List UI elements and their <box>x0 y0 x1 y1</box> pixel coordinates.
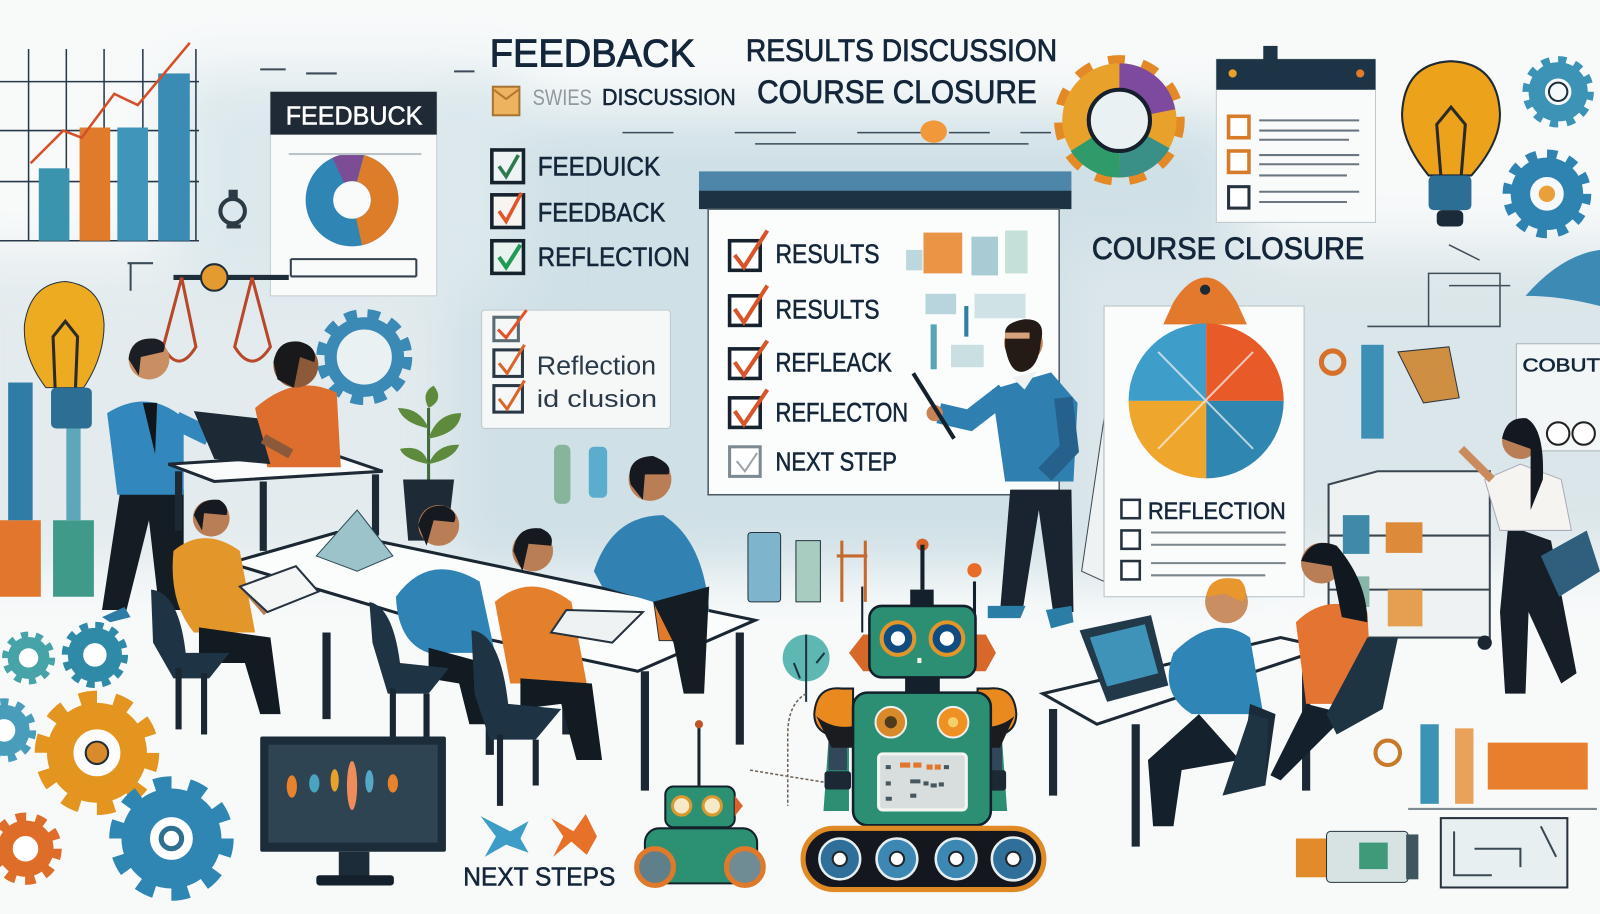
whiteboard <box>699 171 1071 495</box>
gear orange <box>0 817 57 880</box>
student blue sweater <box>1169 628 1263 714</box>
icon: instruments <box>1321 345 1459 439</box>
tracks <box>803 828 1044 890</box>
whiteboard checklist: REFLECTON <box>776 397 908 427</box>
label: next steps: NEXT STEPS <box>463 863 615 891</box>
bar chart top left <box>0 43 199 241</box>
person: woman with bag <box>1461 418 1600 694</box>
icon: battery canister <box>1296 831 1418 882</box>
decorative dash row <box>622 133 1051 144</box>
icon: orange clip <box>1163 277 1247 324</box>
plant <box>398 386 461 541</box>
head <box>869 606 976 677</box>
icon: light bulb top right <box>1402 61 1500 226</box>
checklist: feedback items: FEEDUICK <box>538 151 660 181</box>
panel: pie chart clipboard <box>1082 277 1304 597</box>
person: seated man in orange with laptop <box>194 341 341 467</box>
icon: schematic card <box>1441 818 1567 887</box>
donut chart <box>309 157 395 243</box>
small sketch right of clipboard <box>1367 245 1510 326</box>
laptop <box>1080 615 1168 702</box>
heading: course closure: COURSE CLOSURE <box>1092 230 1364 266</box>
robot screen <box>879 754 966 810</box>
icon: striped leaf <box>1526 250 1600 306</box>
whiteboard checklist: RESULTS <box>776 239 880 269</box>
panel: reflection card: Reflection <box>537 352 656 380</box>
person: teacher <box>913 319 1078 628</box>
gear amber <box>42 698 152 808</box>
panel heading: FEEDBUCK <box>286 102 422 130</box>
icon: teal globe with dashed wire <box>750 634 832 806</box>
whiteboard checklist <box>730 231 908 476</box>
card: course <box>1516 344 1600 451</box>
bottom left gears <box>0 625 227 894</box>
title: course closure: COURSE CLOSURE <box>757 73 1037 110</box>
icon: orange envelope <box>493 87 519 115</box>
panel: feedback dashboard <box>270 92 437 296</box>
gear teal <box>5 634 52 681</box>
subtitle: discussion: DISCUSSION <box>602 84 736 110</box>
big robot <box>803 539 1044 890</box>
small vials <box>554 445 867 602</box>
icon: small figure ornament <box>220 190 245 226</box>
monitor <box>260 737 446 885</box>
icon: orange marker <box>920 120 947 143</box>
subtitle: discussion: SWIES <box>533 85 592 110</box>
pie chart <box>1129 323 1284 478</box>
arms <box>814 688 1016 811</box>
mini bar chart bottom right <box>1376 724 1597 809</box>
decorative marks top <box>128 69 474 291</box>
whiteboard mini charts <box>906 231 1028 369</box>
icon: orange cup <box>653 597 682 641</box>
icon: small robot <box>637 720 763 885</box>
whiteboard checklist: NEXT STEP <box>776 448 897 476</box>
long student table <box>230 532 755 791</box>
whiteboard checklist: REFLEACK <box>776 347 892 377</box>
clipboard checklist <box>1121 498 1286 579</box>
person: student orange shirt <box>471 528 643 806</box>
person: standing man in blue <box>102 338 209 622</box>
checklist: feedback items: FEEDBACK <box>538 197 666 227</box>
gear blue small <box>65 625 124 684</box>
table <box>1043 638 1327 724</box>
person: student from behind <box>594 456 709 694</box>
bookshelf <box>1329 471 1492 660</box>
antennas <box>862 539 982 632</box>
icon: blue gear upper <box>1527 60 1590 123</box>
checklist: feedback items <box>492 150 690 273</box>
icon: blue gear lower <box>1507 154 1587 234</box>
clipboard checklist: REFLECTION <box>1148 498 1286 525</box>
whiteboard checklist: RESULTS <box>776 294 880 324</box>
icon: balance scale <box>163 264 289 361</box>
gear blue edge <box>0 702 33 759</box>
student orange <box>1296 604 1372 704</box>
panel: top checklist card <box>1216 46 1376 222</box>
panel: reflection card: id clusion <box>537 386 657 413</box>
right desk students <box>1043 543 1398 847</box>
icon: glass device <box>316 510 393 571</box>
person: student yellow shirt <box>151 500 318 734</box>
icon: multicolour gear <box>1060 61 1179 180</box>
icon: next steps arrows <box>481 814 597 857</box>
left bulb and columns <box>0 282 104 597</box>
gear blue large <box>116 783 227 894</box>
panel: reflection card <box>482 310 670 428</box>
table upper left <box>168 454 383 551</box>
icon: blue gear centre <box>321 314 407 400</box>
title: feedback: FEEDBACK <box>490 32 695 75</box>
person: student blue shirt <box>369 505 495 765</box>
ears <box>849 634 996 671</box>
subtitle: discussion <box>533 84 736 110</box>
card: course: COBUT <box>1522 354 1600 375</box>
checklist: feedback items: REFLECTION <box>538 242 690 272</box>
title: results discussion: RESULTS DISCUSSION <box>746 32 1057 68</box>
torso <box>853 693 991 825</box>
